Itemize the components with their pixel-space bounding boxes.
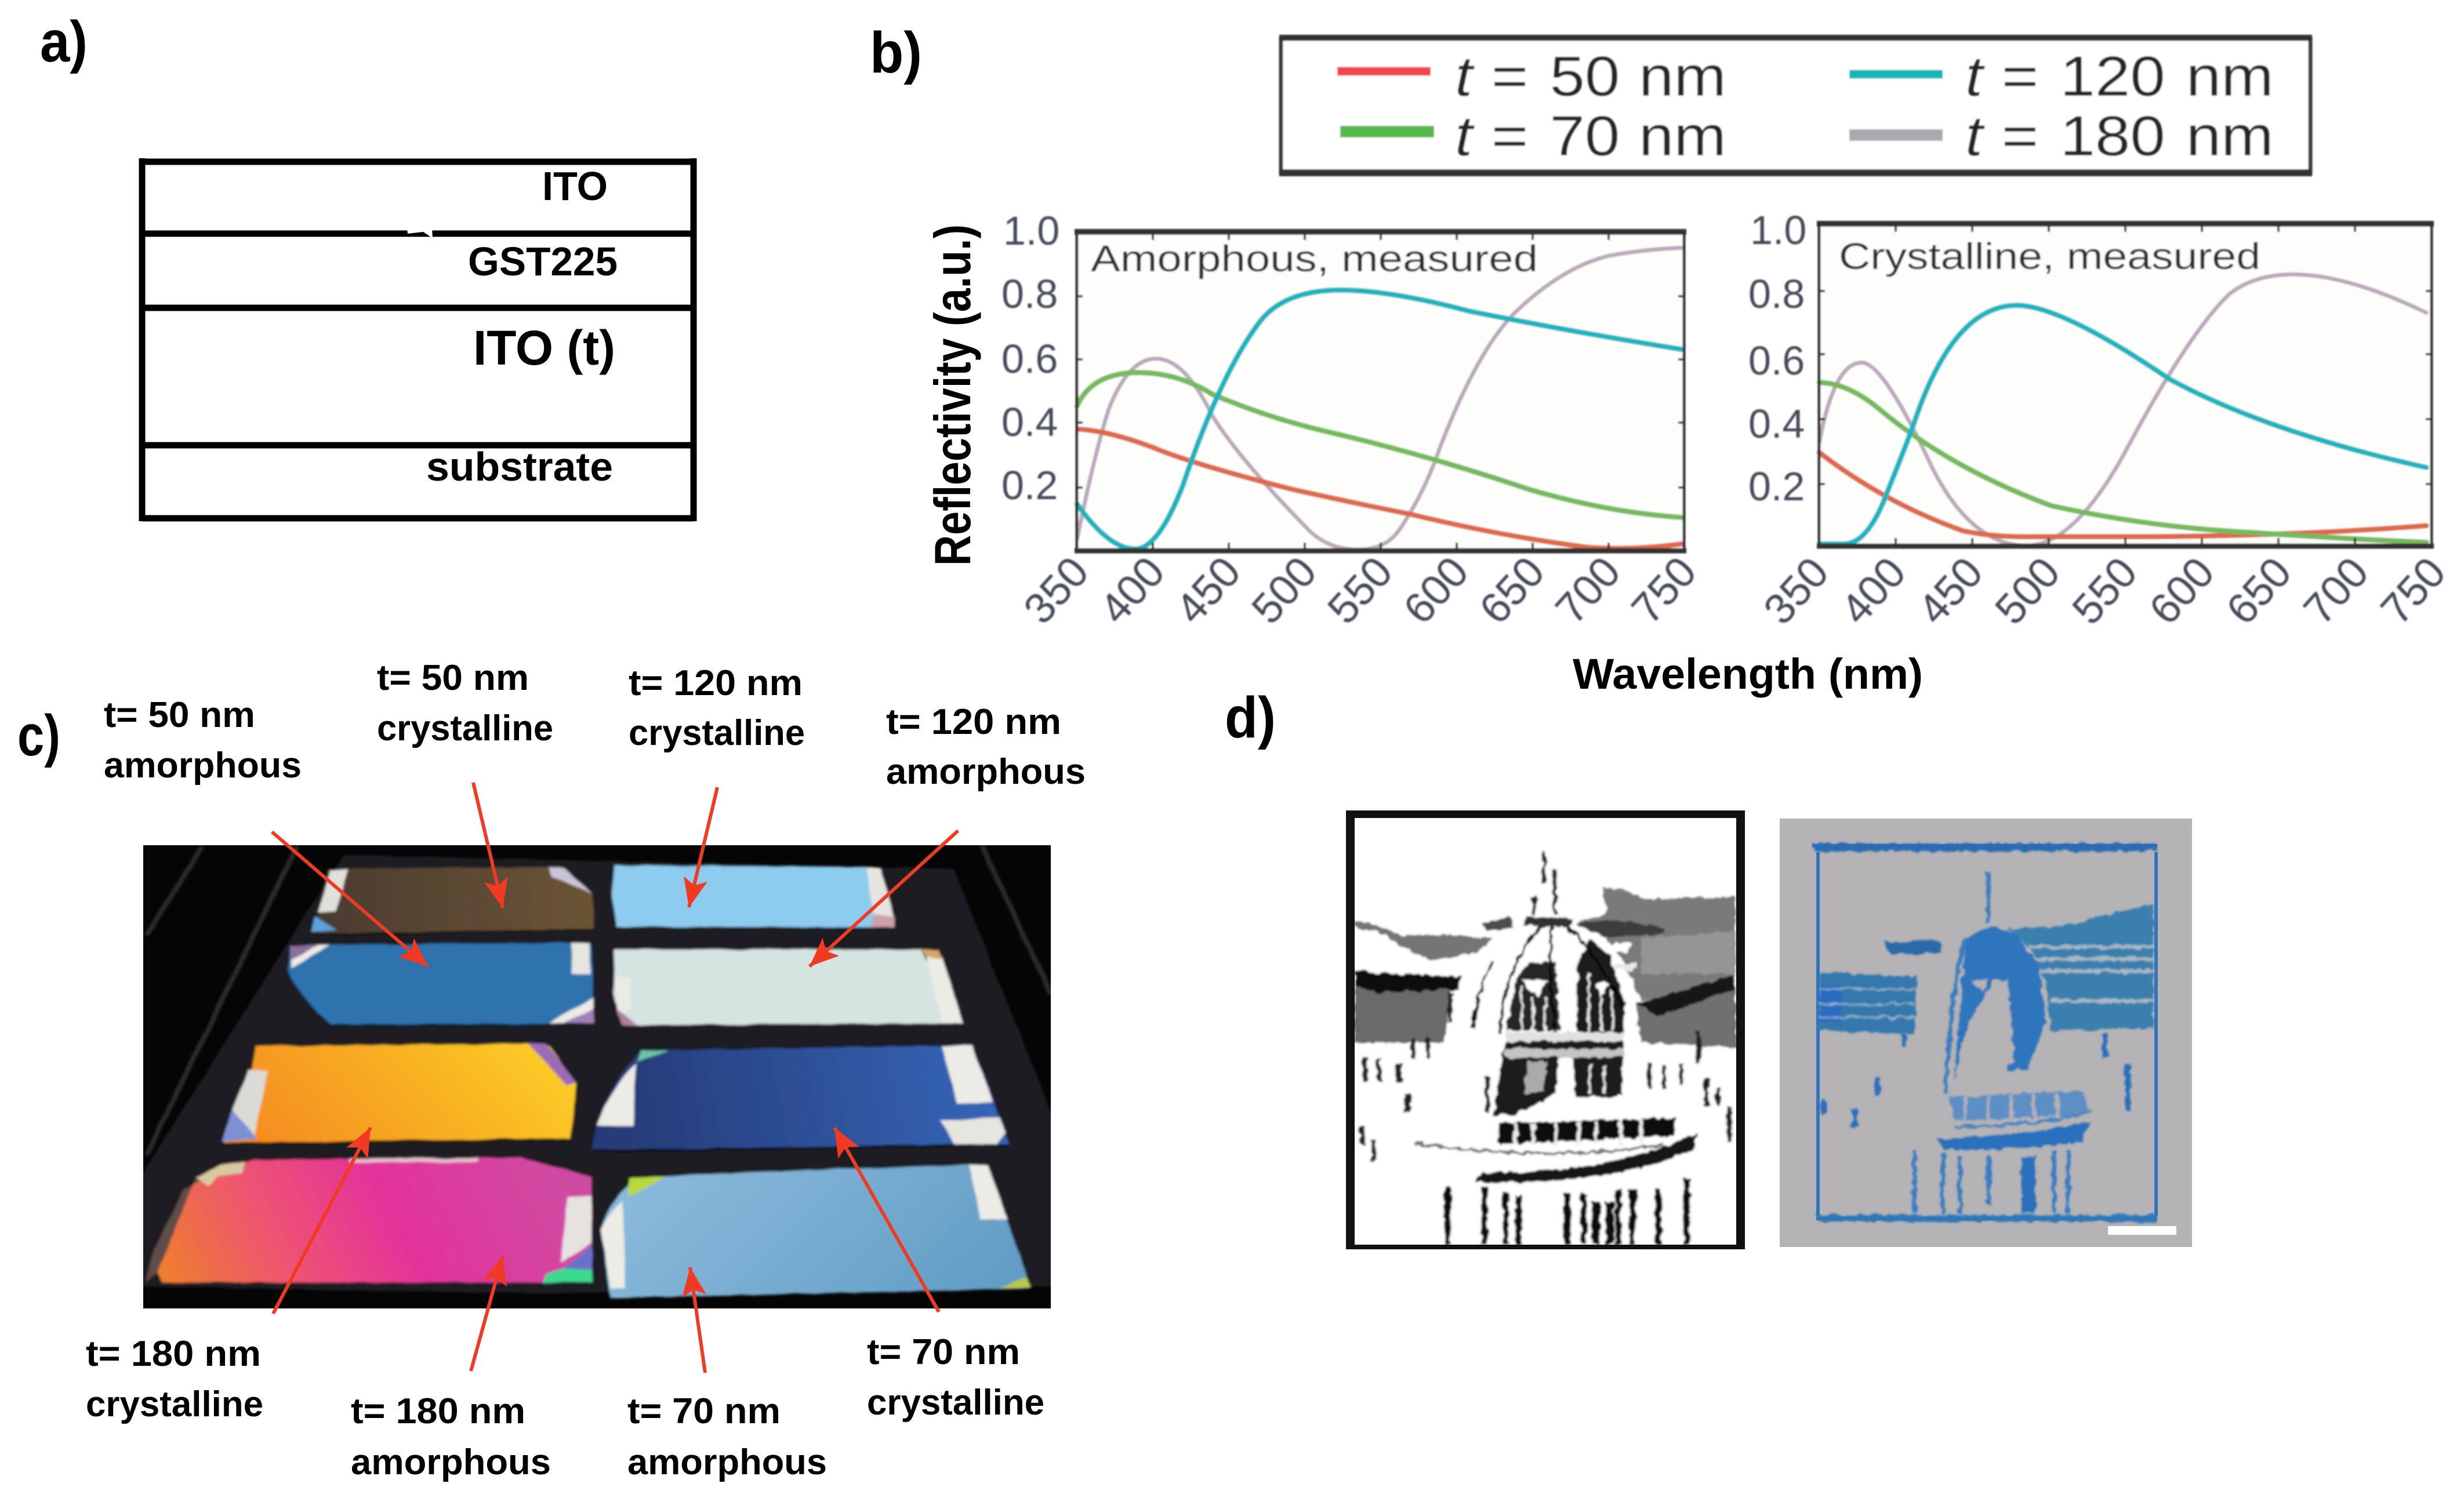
chart title amorphous: Amorphous, measured: [1091, 238, 1538, 279]
legend: [1279, 38, 2312, 173]
label: t=120 amorphous: amorphous: [886, 752, 1086, 792]
x tick labels left: 650: [1470, 547, 1554, 633]
sample: t=120 crystalline light blue: [612, 866, 894, 928]
legend key: 70 nm: t: [1455, 104, 1490, 168]
legend key: 180 nm: 180: [2060, 104, 2183, 168]
x tick labels right: 350: [1754, 548, 1838, 634]
label: t=70 amorphous: t= 70 nm: [627, 1391, 781, 1431]
label: t=50 crystalline: t= 50 nm: [377, 658, 529, 698]
label: t=120 amorphous: [886, 702, 1086, 792]
y axis title: Reflectivity (a.u.): [924, 224, 981, 566]
legend key: 70 nm: 70: [1550, 104, 1638, 168]
y tick labels left: 0.6: [1001, 336, 1058, 381]
legend key: 180 nm: [1849, 104, 2274, 168]
chart title crystalline: Crystalline, measured: [1839, 235, 2260, 277]
legend key: 70 nm: =: [1492, 104, 1545, 168]
printed frame: [1812, 846, 2157, 1219]
x tick labels left: 550: [1318, 547, 1402, 633]
layer stack diagram: [142, 158, 694, 521]
y tick labels right: 1.0: [1750, 208, 1806, 253]
legend key: 50 nm: nm: [1639, 45, 1726, 108]
y tick labels left: 0.8: [1001, 271, 1058, 317]
arrow: t=180 crystalline: [273, 1128, 371, 1314]
legend key: 70 nm: nm: [1639, 104, 1726, 168]
legend key: 50 nm: t: [1455, 45, 1490, 108]
legend key: 180 nm: t: [1965, 104, 2000, 168]
x tick labels right: [1754, 548, 2455, 634]
label: t=180 amorphous: amorphous: [351, 1442, 551, 1482]
x tick labels right: 700: [2294, 548, 2378, 634]
legend key: 120 nm: nm: [2186, 45, 2274, 108]
legend key: 50 nm: [1337, 45, 1726, 108]
y tick labels left: [1001, 208, 1059, 508]
chart: amorphous reflectivity: [1001, 208, 1705, 633]
label: t=50 crystalline: [377, 658, 553, 748]
label: t=70 crystalline: [867, 1332, 1044, 1423]
legend key: 180 nm: nm: [2186, 104, 2274, 168]
label: t=120 crystalline: t= 120 nm: [629, 663, 803, 703]
image: printed dome on GST film, blue on grey: [1780, 819, 2192, 1247]
legend key: 120 nm: =: [2002, 45, 2056, 108]
frame and ticks crystalline: [1817, 224, 2434, 546]
x tick labels right: 750: [2371, 548, 2455, 634]
sample: t=50 crystalline brown: [311, 867, 594, 934]
legend key: 50 nm: 50: [1550, 45, 1638, 108]
label: t=50 amorphous: [104, 695, 302, 786]
layer: ITO thickness t: ITO (t): [473, 321, 615, 375]
x tick labels right: 500: [1986, 548, 2069, 634]
y tick labels left: 0.4: [1001, 399, 1058, 445]
legend key: 180 nm: =: [2002, 104, 2056, 168]
curves amorphous: [1077, 248, 1681, 550]
curves crystalline: [1819, 274, 2426, 546]
label: t=180 amorphous: [351, 1391, 551, 1482]
label: t=120 crystalline: crystalline: [629, 713, 805, 753]
legend key: 120 nm: t: [1965, 45, 2000, 108]
x tick labels left: 500: [1242, 547, 1326, 633]
panel label a: a): [40, 9, 88, 74]
layer: GST225: GST225: [468, 239, 618, 284]
arrow: t=70 amorphous: [690, 1267, 705, 1373]
x tick labels right: 600: [2140, 548, 2223, 634]
label: t=180 amorphous: t= 180 nm: [351, 1391, 525, 1431]
x tick labels left: 600: [1394, 547, 1478, 633]
y tick labels right: 0.6: [1748, 338, 1805, 383]
layer: substrate: substrate: [426, 444, 613, 489]
frame and ticks amorphous: [1075, 232, 1686, 551]
x tick labels left: 350: [1014, 547, 1098, 633]
y tick labels left: 1.0: [1003, 208, 1059, 253]
panel label c: c): [17, 703, 60, 768]
label: t=70 crystalline: crystalline: [867, 1383, 1044, 1423]
label: t=180 crystalline: [86, 1334, 263, 1424]
label: t=50 amorphous: t= 50 nm: [104, 695, 255, 735]
x tick labels left: 450: [1166, 547, 1250, 633]
y tick labels right: 0.4: [1748, 401, 1805, 446]
label: t=180 crystalline: crystalline: [86, 1384, 263, 1424]
label: t=120 crystalline: [629, 663, 805, 753]
label: t=120 amorphous: t= 120 nm: [886, 702, 1061, 742]
x tick labels left: 750: [1622, 547, 1705, 633]
x axis title: Wavelength (nm): [1573, 650, 1923, 698]
label: t=70 crystalline: t= 70 nm: [867, 1332, 1020, 1372]
arrow: t=70 crystalline: [834, 1128, 939, 1312]
legend key: 70 nm: [1340, 104, 1726, 168]
x tick labels left: 700: [1546, 547, 1630, 633]
sample: t=50 amorphous blue: [288, 943, 594, 1025]
panel label d: d): [1225, 685, 1276, 750]
legend key: 120 nm: 120: [2060, 45, 2183, 108]
sample: t=70 crystalline dark blue: [591, 1045, 1009, 1150]
label: t=180 crystalline: t= 180 nm: [86, 1334, 261, 1374]
label: t=50 amorphous: amorphous: [104, 746, 302, 786]
arrow: t=50 amorphous: [272, 832, 428, 966]
x tick labels right: 450: [1908, 548, 1992, 634]
frame of target image: [1346, 810, 1745, 1249]
layer: top ITO: ITO: [542, 163, 608, 209]
scale bar: [2108, 1226, 2176, 1235]
y tick labels right: [1748, 208, 1806, 509]
photo of coated samples: [138, 845, 1055, 1308]
arrow: t=50 crystalline: [473, 783, 503, 908]
sample: t=180 amorphous pink: [146, 1158, 591, 1282]
x tick labels right: 400: [1831, 548, 1915, 634]
legend key: 50 nm: =: [1492, 45, 1545, 108]
y tick labels left: 0.2: [1001, 463, 1058, 508]
sample: t=120 amorphous pale: [614, 950, 963, 1025]
chart: crystalline reflectivity: [1748, 208, 2455, 634]
sample: t=180 crystalline orange: [222, 1043, 576, 1143]
x tick labels left: [1014, 547, 1705, 633]
y tick labels right: 0.8: [1748, 271, 1805, 317]
label: t=50 crystalline: crystalline: [377, 708, 553, 748]
label: t=70 amorphous: [627, 1391, 827, 1482]
x tick labels right: 550: [2063, 548, 2146, 634]
arrow: t=120 crystalline: [689, 787, 717, 907]
x tick labels right: 650: [2217, 548, 2300, 634]
arrow: t=180 amorphous: [471, 1256, 503, 1371]
legend key: 120 nm: [1849, 45, 2274, 108]
sample: t=70 amorphous sky blue: [601, 1165, 1030, 1298]
arrow: t=120 amorphous: [810, 831, 958, 966]
panel label b: b): [870, 20, 922, 85]
panel a: layer stack: [40, 9, 694, 521]
image: target dome pattern, black and white: [1346, 810, 1745, 1249]
x tick labels left: 400: [1090, 547, 1174, 633]
y tick labels right: 0.2: [1748, 464, 1805, 509]
label: t=70 amorphous: amorphous: [627, 1442, 827, 1482]
